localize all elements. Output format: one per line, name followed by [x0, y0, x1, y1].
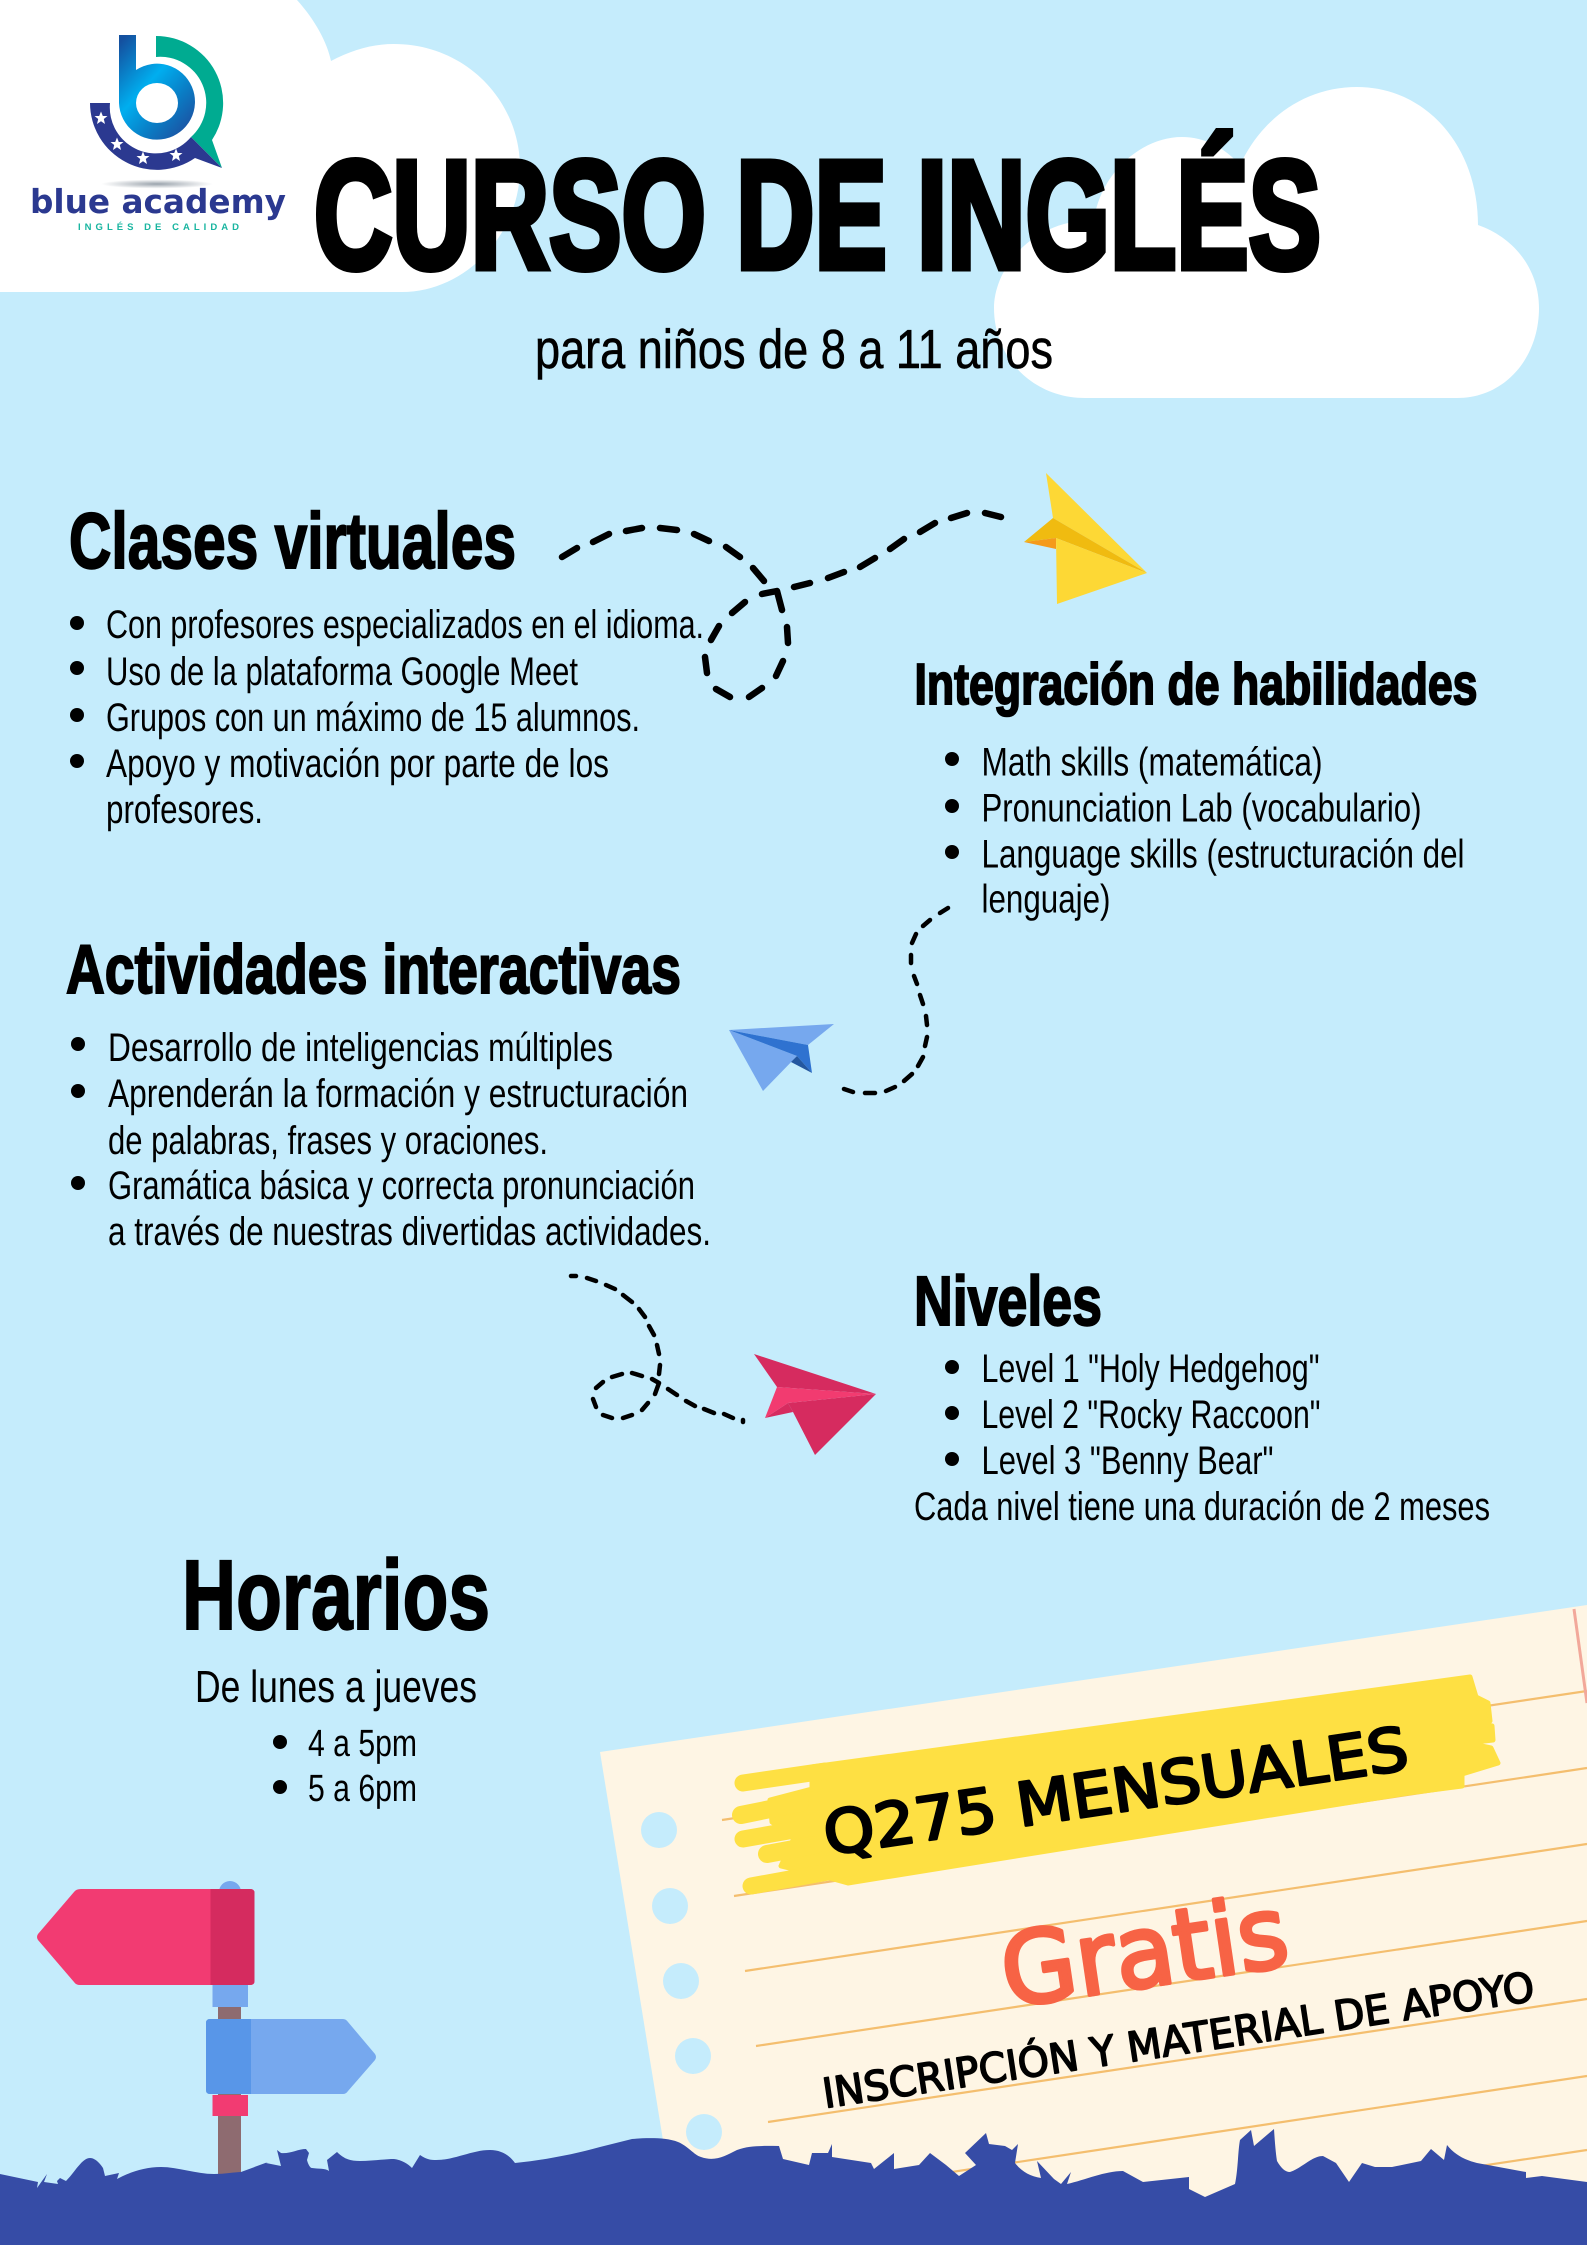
red collar: [212, 2095, 248, 2116]
icon: blue paper plane: [729, 1024, 834, 1091]
logo wordmark: blue academy: [30, 182, 286, 221]
text: inscripcion y material de apoyo: INSCRIPCIÓN Y MATERIAL DE APOYO: [819, 1962, 1537, 2118]
list: actividades interactivas: [71, 1026, 711, 1254]
cloud: top right: [994, 87, 1539, 398]
blue collar: [212, 1985, 248, 2007]
list: actividades interactivas: Aprenderán la formación y estructuración: [108, 1072, 688, 1116]
arrow: dashed path to pink plane: [571, 1276, 743, 1422]
list: niveles: Level 2 "Rocky Raccoon": [982, 1393, 1320, 1437]
subtitle: para niños de 8 a 11 años: [535, 318, 1053, 380]
list: clases virtuales: Uso de la plataforma Google Meet: [106, 650, 578, 694]
logo: blue academy: [30, 35, 286, 233]
list: niveles: Level 1 "Holy Hedgehog": [982, 1347, 1320, 1391]
panel: clases virtuales: [69, 496, 704, 832]
list: horarios: 4 a 5pm: [308, 1723, 417, 1765]
list: integracion de habilidades: lenguaje): [982, 878, 1110, 922]
list: clases virtuales: Apoyo y motivación por parte de los: [106, 742, 609, 786]
arrow: dashed path to yellow plane: [562, 513, 1001, 697]
list: integracion de habilidades: Pronunciation Lab (vocabulario): [982, 786, 1422, 830]
binder holes: [641, 1812, 722, 2150]
price: q275 mensuales: Q275 MENSUALES: [819, 1714, 1413, 1870]
list: integracion de habilidades: Math skills (matemática): [982, 740, 1322, 784]
list: integracion de habilidades: Language skills (estructuración del: [982, 832, 1464, 876]
list: clases virtuales: profesores.: [106, 788, 263, 832]
ground: [0, 2129, 1587, 2245]
red arrow sign: [37, 1889, 254, 1985]
icon: signpost: [37, 1881, 376, 2190]
post cap: [219, 1881, 241, 1892]
heading: actividades interactivas: Actividades interactivas: [66, 931, 681, 1008]
cloud: top left: [0, 0, 520, 292]
yellow highlighter: [741, 1677, 1498, 1886]
paper sheet: [600, 1605, 1587, 2245]
list: clases virtuales: [70, 603, 704, 832]
panel: actividades interactivas: [66, 931, 711, 1254]
list: horarios: 5 a 6pm: [308, 1768, 417, 1810]
arrow: dashed path to blue plane: [844, 908, 948, 1093]
icon: pink paper plane: [754, 1354, 876, 1455]
logo icon: navy starred arc: [90, 103, 222, 170]
list: actividades interactivas: de palabras, frases y oraciones.: [108, 1119, 548, 1163]
heading: clases virtuales: Clases virtuales: [69, 496, 516, 585]
post: [218, 1890, 241, 2190]
logo shadow: [101, 180, 213, 188]
list: integracion de habilidades: [945, 740, 1464, 922]
panel: horarios: [182, 1539, 490, 1810]
logo tagline: INGLÉS DE CALIDAD: [78, 221, 239, 233]
logo icon: letter b: [119, 35, 195, 140]
list: actividades interactivas: a través de nuestras divertidas actividades.: [108, 1210, 711, 1254]
blue arrow sign: [206, 2019, 376, 2094]
logo icon: teal speech arc: [156, 36, 223, 168]
list: niveles: Level 3 "Benny Bear": [982, 1439, 1274, 1483]
ruled lines: [722, 1691, 1587, 2198]
text: gratis: Gratis: [993, 1873, 1295, 2031]
text: de lunes a jueves: De lunes a jueves: [195, 1661, 477, 1712]
list: niveles: [914, 1347, 1490, 1529]
list: clases virtuales: Con profesores especializados en el idioma.: [106, 603, 704, 647]
margin line: [1574, 1609, 1587, 1703]
heading: horarios: Horarios: [182, 1539, 490, 1650]
logo icon: stars: [94, 112, 182, 164]
list: horarios: [273, 1723, 417, 1810]
panel: notebook paper: [600, 1605, 1587, 2245]
heading: niveles: Niveles: [914, 1262, 1102, 1340]
list: clases virtuales: Grupos con un máximo de 15 alumnos.: [106, 696, 640, 740]
panel: niveles: [914, 1262, 1490, 1529]
icon: yellow paper plane: [1024, 473, 1147, 604]
panel: integracion de habilidades: [914, 652, 1478, 922]
list: actividades interactivas: Desarrollo de inteligencias múltiples: [108, 1026, 613, 1070]
list: actividades interactivas: Gramática básica y correcta pronunciación: [108, 1164, 695, 1208]
